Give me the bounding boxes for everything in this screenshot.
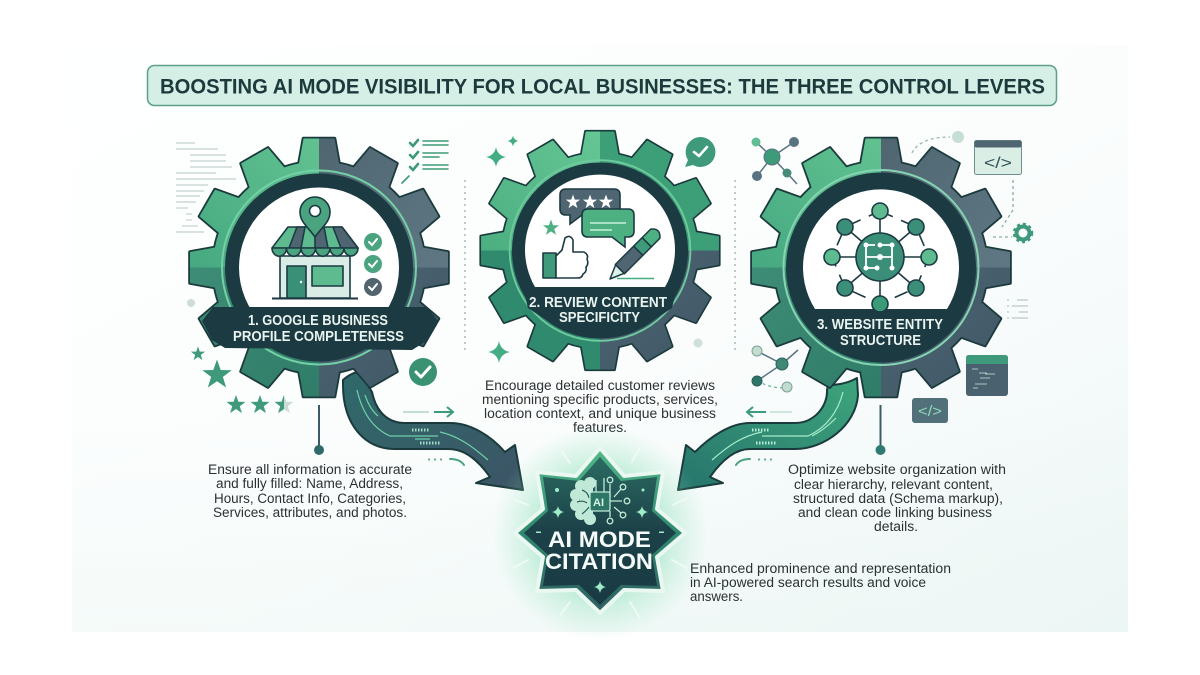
speech check [685,137,715,167]
sparkles [486,136,518,363]
banner label: 2. REVIEW CONTENT [529,295,667,311]
flow arrow: lever 3 to citation [678,378,858,490]
star shape [515,448,685,613]
grey dot [187,299,195,307]
gear body [746,132,1016,402]
icon: completeness checks [364,233,382,296]
text: citation description: answers. [690,589,743,604]
banner label: 3. WEBSITE ENTITY [817,317,943,333]
text: lever 2 description: features. [573,420,627,435]
text: citation description: in AI-powered search results and voice [690,575,926,590]
list lines [1007,300,1028,318]
inner white hub [525,175,675,287]
panel: lever 1 gear [184,132,454,402]
sparkles [536,488,664,593]
icon: pen [605,226,663,284]
check badge [409,358,437,386]
decorative dots beside arrows [429,459,771,465]
rating stars [191,346,294,413]
connector: lever 3 stem [876,405,886,455]
text: lever 3 description: Optimize website organization with [788,462,1006,477]
gear body [476,126,724,375]
ribbon label: PROFILE COMPLETENESS [233,329,404,345]
text: lever 3 description [788,462,1006,534]
code panel [966,355,1008,396]
dotted dividers [465,180,735,353]
icon: store with location pin [272,197,358,298]
callout: AI mode citation badge [492,425,708,641]
code window: </> [984,155,1012,172]
icon: small star [543,220,559,235]
text: lever 3 description: details. [874,519,918,534]
panel: lever 3 gear [746,132,1016,402]
code lines [176,143,236,232]
icon: AI brain [570,477,630,525]
text: lever 1 description: Hours, Contact Info, Categories, [214,491,406,506]
small arrow left [770,411,792,413]
text: lever 1 description [208,462,412,520]
icon: AI brain: AI [593,497,604,509]
code tag: </> [918,403,942,420]
banner label [523,287,677,326]
inner white hub [803,189,959,309]
badge label: CITATION [545,549,653,574]
code window [974,140,1022,174]
text: lever 3 description: clear hierarchy, relevant content, [794,477,993,492]
ribbon label [202,307,438,350]
banner label: STRUCTURE [840,333,921,349]
network lower left [752,346,798,392]
glow [492,425,708,641]
text: lever 3 description: structured data (Schema markup), [793,491,1003,506]
text: citation description [690,561,951,604]
text: lever 2 description: location context, and unique business [484,406,716,421]
icon: small gear [1014,224,1032,242]
panel: lever 3 decorations [747,131,1032,423]
panel: lever 2 decorations [486,136,715,363]
code tag [912,398,948,423]
dotted path and node [912,131,964,153]
network top left [752,137,799,184]
icon: comment bubble [582,209,634,247]
text: lever 2 description: Encourage detailed customer reviews [485,378,715,393]
inner white hub [239,188,399,348]
panel: lever 2 gear [476,126,724,375]
icon: review bubble with stars [560,189,620,224]
grey dot [694,338,702,348]
text: citation description: Enhanced prominence and representation [690,561,951,576]
badge label: AI MODE [548,527,651,552]
flow arrow: lever 1 to citation [343,372,523,490]
text: lever 3 description: and clean code linking business [798,505,992,520]
panel: background [72,45,1128,632]
text: lever 2 description: mentioning specific products, services, [482,392,718,407]
checklist [402,140,448,183]
connector: lever 1 stem [314,405,324,455]
gear body [184,132,454,402]
text: lever 2 description [482,378,718,435]
dashed link [993,180,1013,237]
banner label: SPECIFICITY [559,310,640,326]
title banner: BOOSTING AI MODE VISIBILITY FOR LOCAL BUSINESSES: THE THREE CONTROL LEVERS [160,76,1045,98]
text: lever 1 description: and fully filled: Name, Address, [216,476,403,491]
rays [513,447,687,618]
icon: thumbs up [543,236,588,278]
badge label [545,527,653,574]
ribbon label: 1. GOOGLE BUSINESS [248,313,388,329]
text: lever 1 description: Services, attributes, and photos. [213,505,407,520]
infographic canvas [72,64,1128,634]
banner label [817,317,943,349]
small arrow right [403,411,429,413]
icon: entity network [824,203,937,312]
text: lever 1 description: Ensure all information is accurate [208,462,412,477]
panel: lever 1 decorations [176,140,453,417]
title banner [148,66,1056,106]
